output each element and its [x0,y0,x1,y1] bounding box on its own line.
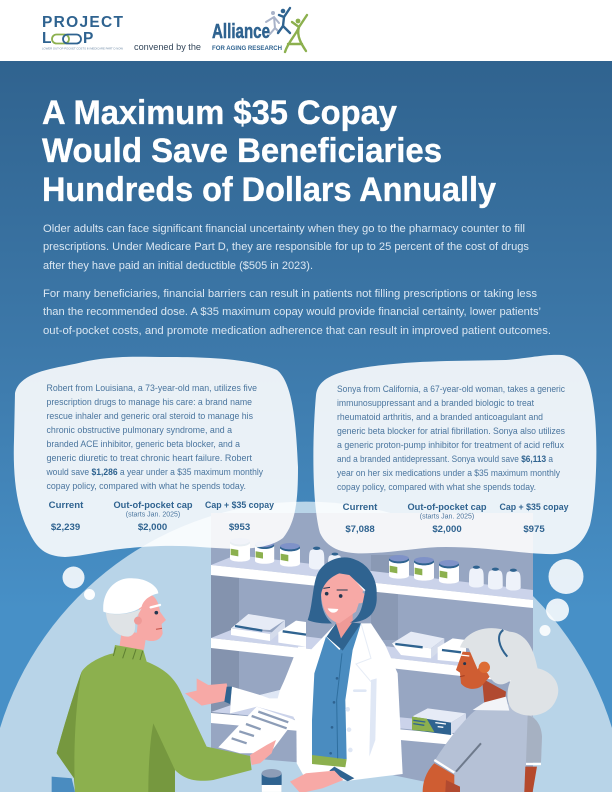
counter [175,752,426,792]
intro paragraph 1: prescriptions. Under Medicare Part D, they are responsible for up to 25 percent of the cost of drugs [43,241,529,253]
green medicine box [412,708,466,735]
intro paragraph 2: For many beneficiaries, financial barriers can result in patients not filling prescriptions or taking less [43,288,537,300]
top shelf [211,555,533,608]
Sonya story text: year on her six medications under a $35 maximum monthly [337,468,560,478]
logo: Project Loop: L [42,30,51,47]
Robert story text: generic diuretic to treat chronic heart failure. Robert [46,453,252,463]
Robert story text: prescription drugs to manage his care: a brand name [46,397,252,407]
older man customer [52,578,276,792]
Robert story text: branded ACE inhibitor, generic beta blocker, and a [46,439,240,449]
Robert cost comparison: Current [49,500,84,511]
Robert story text [46,383,263,491]
lab coat [296,623,403,781]
neck [482,678,506,703]
sweater [57,645,252,792]
header band [0,0,612,61]
logo: Project Loop: P [83,30,93,47]
Robert cost comparison: (starts Jan. 2025) [126,512,180,518]
pharmacist [185,557,403,781]
Robert story text: rescue inhaler and generic oral steroid to manage his [46,411,253,421]
logo: Alliance for Aging Research [212,8,307,52]
logo: Project Loop [42,14,124,50]
hair [460,628,558,716]
Sonya story text: a generic proton-pump inhibitor for treatment of acid reflux [337,440,564,450]
prescription paper [218,707,295,753]
jars and bottles on top shelf [230,538,521,591]
light blue backdrop arc [0,502,612,792]
Robert cost comparison: $2,000 [138,522,167,533]
face [321,572,363,623]
Robert cost comparison: Cap + $35 copay [205,500,275,511]
pharmacist hand on counter [290,767,354,792]
Sonya cost comparison: Out-of-pocket cap [408,502,487,513]
Robert story text: Robert from Louisiana, a 73-year-old man, utilizes five [46,383,257,393]
intro paragraph 2 [43,288,551,337]
Sonya story text: copay policy, compared with what she spends today. [337,482,536,492]
neck [119,632,147,650]
thought dots: right [540,559,584,636]
intro paragraph 1 [43,223,529,272]
Sonya story text: and a branded antidepressant. Sonya would save $6,113 a [337,454,553,464]
title: Hundreds of Dollars Annually [42,171,496,209]
Sonya story text: generic beta blocker for atrial fibrillation. Sonya also utilizes [337,426,565,436]
title [42,94,496,209]
Sonya cost comparison: $975 [523,524,545,535]
older woman customer [423,628,558,792]
shirt [312,623,361,759]
Robert cost comparison [49,500,275,533]
chair [52,777,75,792]
hair [308,557,377,623]
Sonya cost comparison: (starts Jan. 2025) [420,514,474,520]
pharmacy shelves [211,513,533,792]
Sonya story text: Sonya from California, a 67-year-old woman, takes a generic [337,384,565,394]
intro paragraph 1: after they have paid an initial deductible ($505 in 2023). [43,260,313,272]
Robert story text: chronic obstructive pulmonary syndrome, and a [46,425,232,435]
bottom shelf [211,702,533,752]
title: A Maximum $35 Copay [42,94,397,132]
logo: Project Loop: LOWER OUT-OF-POCKET COSTS IN MEDICARE PART D NOW [42,46,123,50]
boxes on middle shelf [231,614,466,663]
Sonya cost comparison: Cap + $35 copay [500,502,569,513]
Sonya cost comparison: Current [343,502,378,513]
logo: Project Loop: PROJECT [42,14,124,31]
hair [106,608,142,637]
medicine jar on counter [262,769,282,792]
Robert story text: copay policy, compared with what he spends today. [46,481,246,491]
forward sleeve [230,647,306,763]
convened by the: convened by the [134,42,201,53]
dress [434,703,542,792]
intro paragraph 2: out-of-pocket costs, and promote medication adherence that can result in improved patient outcomes. [43,325,551,337]
Sonya cost comparison: $7,088 [345,524,375,535]
Sonya story text: rheumatoid arthritis, and a branded anticoagulant and [337,412,543,422]
Robert story text: would save $1,286 a year under a $35 maximum monthly [46,467,263,477]
middle shelf [211,628,533,684]
Sonya story text [337,384,565,492]
thought dots: left [62,566,95,600]
logo: Alliance for Aging Research: FOR AGING RESEARCH [212,45,283,52]
Sonya cost comparison: $2,000 [432,524,462,535]
arms [423,763,454,792]
eyes and smile [325,592,328,595]
Robert cost comparison: $2,239 [51,522,80,533]
logo: Alliance for Aging Research: Alliance [212,21,270,43]
thought bubble: Robert [14,357,298,557]
Robert cost comparison: $953 [229,522,250,533]
hand holding paper [250,740,276,765]
intro paragraph 1: Older adults can face significant financial uncertainty when they go to the pharmacy counter to fill [43,223,525,235]
Robert cost comparison: Out-of-pocket cap [114,500,193,511]
title: Would Save Beneficiaries [42,132,442,170]
forward hand [185,678,230,706]
Sonya cost comparison [343,502,569,535]
face [137,594,166,641]
Sonya story text: immunosuppressant and a branded biologic to treat [337,398,534,408]
thought bubble: Sonya [313,355,596,554]
neck and collar [336,613,353,638]
face [456,652,493,689]
intro paragraph 2: than the recommended dose. A $35 maximum copay would provide financial certainty, lower patients’ [43,306,541,318]
